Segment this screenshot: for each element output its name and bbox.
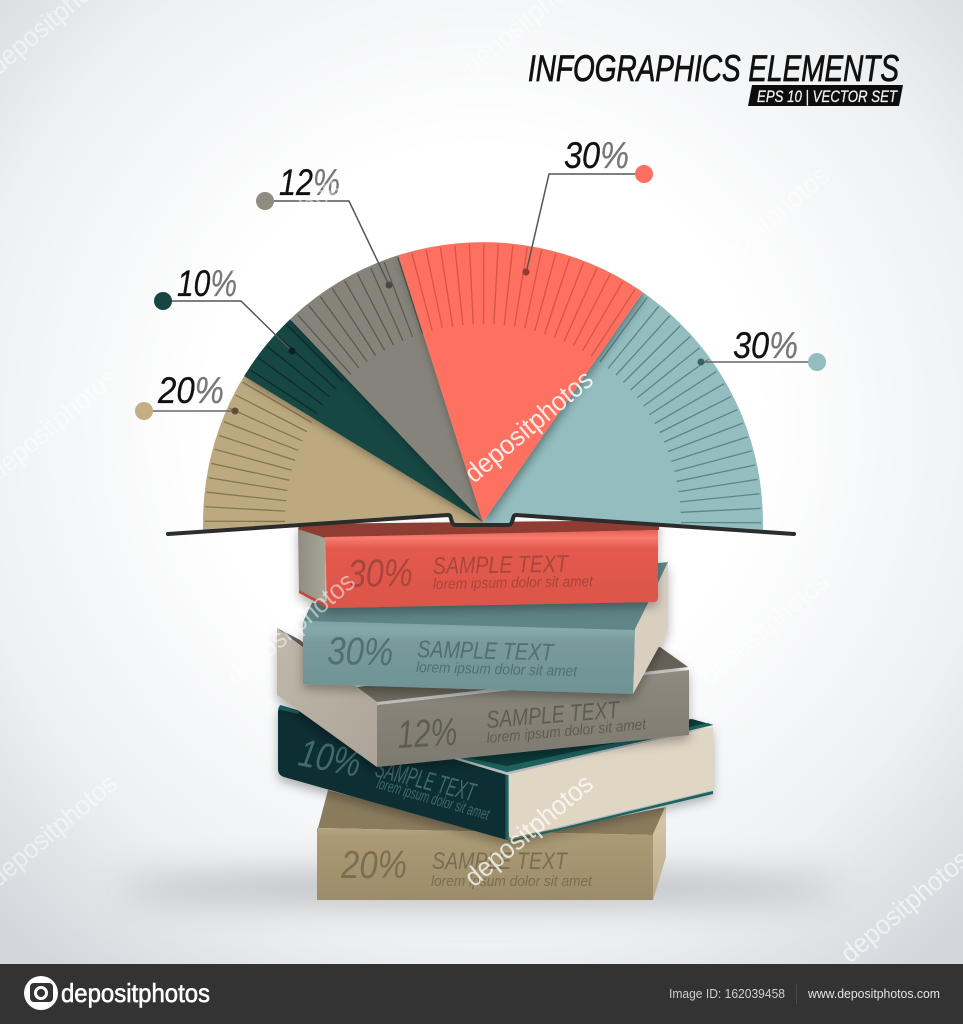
book: 20% tan: SAMPLE TEXT <box>432 848 569 875</box>
watermarks: depositphotos <box>695 566 835 691</box>
segment: dark green 10% <box>243 319 483 523</box>
book: 30% teal <box>303 562 668 694</box>
book: 10% dark green <box>278 705 713 842</box>
book stack <box>277 520 713 900</box>
floor shadow <box>120 873 840 903</box>
label: 30% red <box>522 135 653 276</box>
segment: teal 30% <box>483 292 763 530</box>
label: 30% red: 30% <box>564 135 629 176</box>
book: 12% grey: SAMPLE TEXT <box>485 696 622 734</box>
website: www.depositphotos.com <box>807 987 940 1001</box>
logo wordmark: depositphotos <box>61 978 210 1008</box>
segment: tan 20% <box>203 376 483 530</box>
label: 20% tan <box>135 370 238 420</box>
book: 30% teal: lorem ipsum dolor sit amet <box>416 659 578 680</box>
book: 30% teal: SAMPLE TEXT <box>417 636 555 667</box>
book: 12% grey: lorem ipsum dolor sit amet <box>486 716 647 747</box>
label: 12% grey: 12% <box>279 162 340 203</box>
subtitle badge: EPS 10 | VECTOR SET <box>757 87 898 106</box>
book: 30% red: 30% <box>347 552 413 596</box>
image id: Image ID: 162039458 <box>669 987 785 1001</box>
semicircle chart <box>203 242 763 530</box>
watermarks: depositphotos <box>459 768 599 893</box>
watermarks: depositphotos <box>459 364 599 489</box>
icon: camera logo <box>24 976 58 1010</box>
book: 30% teal: 30% <box>327 630 394 674</box>
book: 30% red: SAMPLE TEXT <box>433 551 570 580</box>
book: 10% dark green: SAMPLE TEXT <box>372 753 480 808</box>
label: 30% teal <box>698 325 826 371</box>
book: 20% tan: 20% <box>340 844 407 887</box>
footer bar <box>0 964 963 1024</box>
label: 10% dark green <box>154 263 296 354</box>
segment: grey 12% <box>290 255 483 523</box>
book: 30% red: lorem ipsum dolor sit amet <box>433 573 594 593</box>
open book cover line <box>168 515 794 534</box>
label: 12% grey <box>256 162 392 288</box>
watermarks: depositphotos <box>695 160 835 285</box>
segment: red 30% <box>397 242 648 523</box>
watermarks: depositphotos <box>221 158 361 283</box>
book: 12% grey <box>277 628 689 767</box>
book: 12% grey: 12% <box>396 711 458 757</box>
book: 10% dark green: lorem ipsum dolor sit amet <box>375 776 491 824</box>
book: 30% red <box>298 520 659 608</box>
book: 10% dark green: 10% <box>295 732 364 786</box>
watermarks: depositphotos <box>221 566 361 691</box>
label: 10% dark green: 10% <box>177 263 237 304</box>
label: 30% teal: 30% <box>733 325 798 366</box>
label: 20% tan: 20% <box>157 370 224 411</box>
book: 20% tan: lorem ipsum dolor sit amet <box>431 873 593 890</box>
book: 20% tan <box>317 790 666 900</box>
